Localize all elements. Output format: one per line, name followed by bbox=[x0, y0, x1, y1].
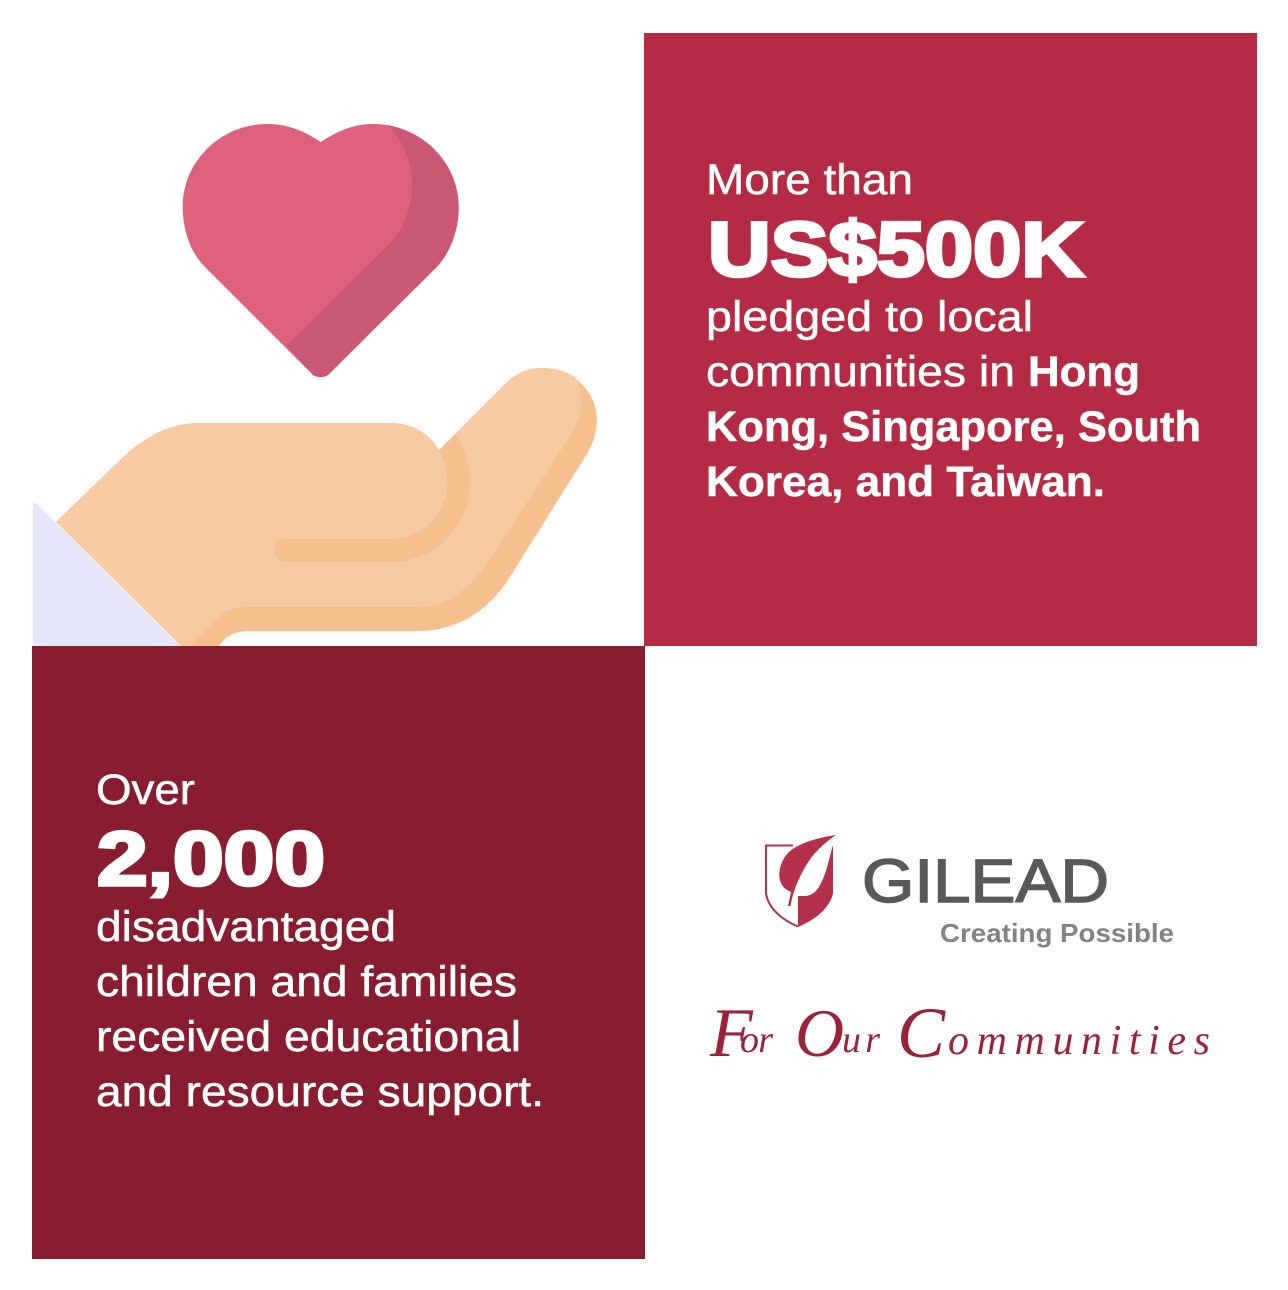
script tagline: For Our Communities: ur bbox=[842, 1019, 880, 1061]
text: pledged to local communities: Kong, Singapore, South bbox=[706, 403, 1201, 451]
icon: shirt cuff bbox=[33, 503, 180, 646]
palm fold bbox=[274, 435, 470, 562]
text: pledged to local communities: pledged to local bbox=[706, 293, 1033, 341]
text: pledged to local communities: Korea, and Taiwan. bbox=[706, 458, 1105, 506]
text: pledged to local communities bbox=[706, 293, 1201, 506]
text: pledged to local communities: Hong bbox=[1028, 348, 1140, 396]
panel: US$500K pledged bbox=[644, 33, 1257, 646]
stat: 2,000: 2,000 bbox=[97, 817, 325, 902]
script tagline: For Our Communities bbox=[709, 993, 1210, 1073]
icon: Gilead shield and leaf bbox=[766, 835, 836, 927]
text: disadvantaged children description: disadvantaged bbox=[96, 903, 396, 951]
text: disadvantaged children description: and resource support. bbox=[96, 1068, 544, 1116]
script tagline: For Our Communities: C bbox=[897, 993, 946, 1073]
wordmark: GILEAD: GILEAD bbox=[862, 847, 1109, 915]
script tagline: For Our Communities: O bbox=[795, 995, 844, 1071]
text: more than: More than bbox=[706, 156, 913, 204]
text: over: Over bbox=[96, 766, 195, 814]
script tagline: For Our Communities: or bbox=[740, 1019, 773, 1061]
text: disadvantaged children description bbox=[96, 903, 544, 1116]
script tagline: For Our Communities: ommunities bbox=[948, 1018, 1210, 1064]
icon: heart bbox=[183, 124, 459, 377]
text: disadvantaged children description: received educational bbox=[96, 1013, 521, 1061]
illustration: hand holding heart bbox=[33, 124, 597, 646]
text: disadvantaged children description: children and families bbox=[96, 958, 517, 1006]
stat: US$500K: US$500K bbox=[708, 207, 1084, 293]
icon: open hand bbox=[56, 368, 597, 646]
text: pledged to local communities: communities in bbox=[706, 348, 1015, 396]
logo: Gilead bbox=[766, 835, 1174, 948]
script tagline: For Our Communities: F bbox=[709, 995, 754, 1072]
panel: 2,000 children and families bbox=[32, 646, 645, 1259]
tagline: Creating Possible: Creating Possible bbox=[940, 918, 1174, 948]
